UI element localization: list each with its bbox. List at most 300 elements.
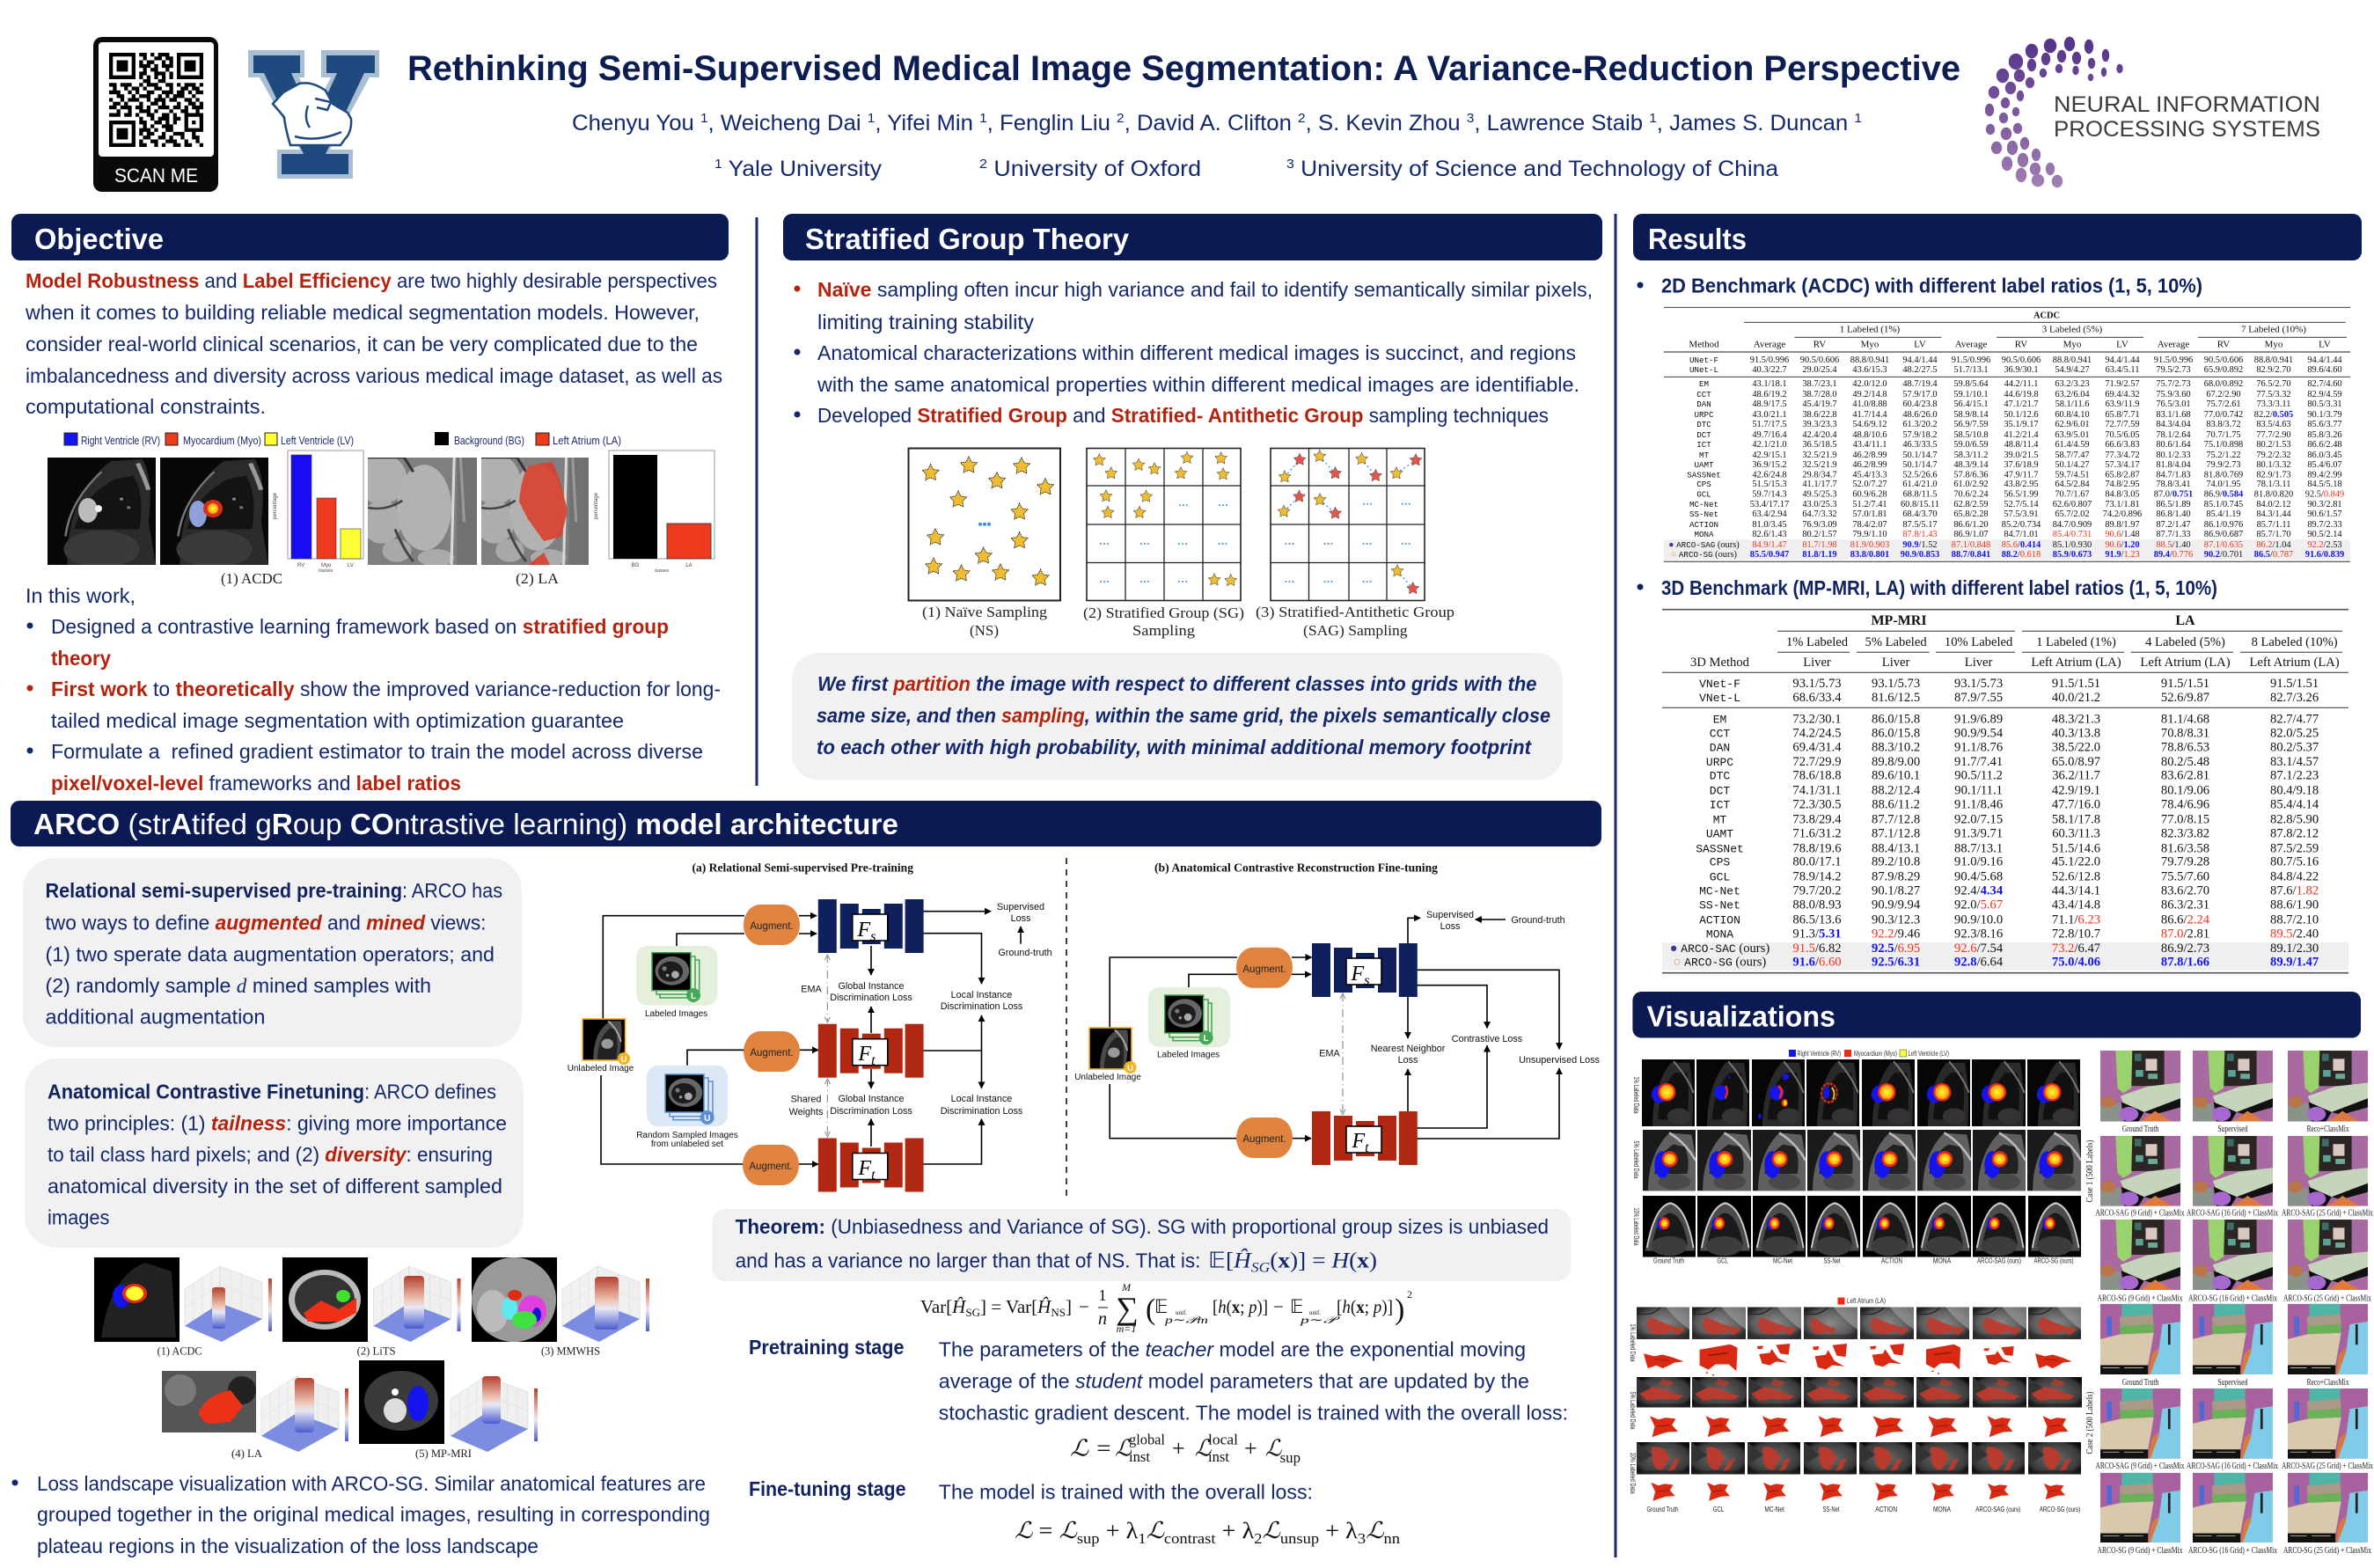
table: MP-MRI and LA results: 89.1/2.30 [2270, 942, 2319, 956]
table: MP-MRI and LA results: 86.3/2.31 [2161, 898, 2209, 912]
table: MP-MRI and LA results: 80.7/5.16 [2270, 855, 2319, 869]
teacher network Ft lower [818, 1139, 924, 1191]
loss labels: Discrimination Loss [830, 1106, 912, 1117]
table: ACDC results: 86.8/1.40 [2156, 509, 2191, 519]
figure: loss landscape visualization [94, 1257, 649, 1460]
teacher network Ft [818, 1024, 924, 1078]
text block: pretraining stage: stochastic gradient descent. The model is trained with the overall loss: [939, 1402, 1568, 1425]
table: ACDC results: 78.1/3.11 [2257, 480, 2290, 489]
figure: LA qualitative results [1629, 1297, 2082, 1513]
table: MP-MRI and LA results: 89.9/1.47 [2270, 956, 2319, 970]
panel: theorem: x)] = H(x) [1278, 1249, 1376, 1273]
icon: QR code with SCAN ME [93, 37, 218, 192]
loss labels: Discrimination Loss [830, 993, 912, 1003]
table: MP-MRI and LA results: ○ ARCO-SG (ours) [1674, 956, 1766, 970]
table: MP-MRI and LA results: 88.2/12.4 [1872, 784, 1921, 798]
table: MP-MRI and LA results: 91.7/7.41 [1954, 755, 2003, 769]
table: MP-MRI and LA results: 73.2/30.1 [1792, 713, 1842, 727]
formula: pretraining loss: inst [1208, 1448, 1229, 1465]
table: ACDC results: 3 Labeled (5%) [2042, 325, 2103, 335]
table: ACDC results: 85.1/0.745 [2204, 500, 2243, 509]
formula: fine-tuning loss: + λ [1215, 1518, 1255, 1543]
table: MP-MRI and LA results: 93.1/5.73 [1792, 677, 1842, 691]
table: ACDC results: 86.2/1.04 [2256, 540, 2291, 550]
image: LA raw and segmentation [356, 454, 589, 567]
text block: In this work: In this work, [26, 584, 136, 607]
table: MP-MRI and LA results: 48.3/21.3 [2052, 713, 2100, 727]
table: ACDC results: 82.9/1.73 [2256, 470, 2291, 480]
text block: loss landscape bullet: grouped together in the original medical images, resulting in corresponding [37, 1503, 710, 1526]
loss labels: Nearest Neighbor [1371, 1044, 1446, 1054]
table: MP-MRI and LA results: 91.3/9.71 [1954, 827, 2003, 841]
augment blocks: Augment. [1242, 964, 1286, 975]
table: MP-MRI and LA results: 60.3/11.3 [2052, 827, 2100, 841]
unlabeled image: U [1127, 1064, 1133, 1073]
formula: variance decomposition: M [1121, 1281, 1132, 1293]
table: ACDC results: 63.4/2.94 [1752, 509, 1787, 519]
formula: pretraining loss: global [1129, 1432, 1165, 1448]
panel: pre-training description: two ways to define augmented and mined views: [46, 912, 486, 934]
text block: In this work [26, 584, 721, 795]
panel: theorem: ( [1270, 1249, 1278, 1273]
text block: objective intro: imbalancedness and diversity across various medical image dataset, as well as [26, 364, 722, 387]
table: ACDC results: 61.4/21.0 [1902, 480, 1938, 489]
formula: variance decomposition: 2 [1407, 1288, 1412, 1301]
table: ACDC results: 45.4/13.3 [1852, 470, 1887, 480]
formula: fine-tuning loss: ℒ [1366, 1518, 1385, 1543]
table: MP-MRI and LA results: 10% Labeled [1945, 635, 2013, 649]
callout: partition and sampling: to each other with high probability, with minimal additional memory footprint [817, 736, 1532, 758]
captions: (4) LA [231, 1447, 263, 1460]
table: ACDC results: 61.0/2.92 [1953, 480, 1989, 489]
table: MP-MRI and LA results: 77.0/8.15 [2161, 813, 2209, 827]
table: MP-MRI and LA results: 87.9/8.29 [1872, 870, 1920, 884]
diagram: naive sampling: (NS) [970, 622, 999, 639]
panel: Stratified Group Theory [783, 214, 1602, 780]
table: ACDC results: 91.9/1.23 [2105, 550, 2140, 560]
panel: theorem: 𝔼[Ĥ [1208, 1248, 1249, 1273]
table: MP-MRI and LA results: 75.0/4.06 [2052, 956, 2100, 970]
table: ACDC results: 87.1/0.635 [2204, 540, 2243, 550]
legend: Left Ventricle (LV) [281, 434, 354, 447]
row and column labels: ACTION [1875, 1506, 1897, 1513]
bar chart: LA classes [594, 451, 714, 574]
table: ACDC results: 62.8/2.59 [1953, 500, 1989, 509]
captions [158, 1345, 600, 1460]
table: ACDC results: 38.7/28.0 [1802, 390, 1837, 399]
table: ACDC results: 51.7/13.1 [1953, 365, 1989, 375]
table: MP-MRI and LA results: 87.1/2.23 [2270, 769, 2319, 783]
loss labels: Contrastive Loss [1452, 1034, 1523, 1044]
table: ACDC results: 78.4/2.07 [1852, 520, 1887, 530]
table: ACDC results: 88.2/0.618 [2002, 550, 2041, 560]
table: ACDC results: 57.9/18.2 [1902, 430, 1938, 440]
table: MP-MRI and LA results: 72.7/29.9 [1792, 755, 1842, 769]
formula: variance decomposition: p∼𝒫m [1164, 1314, 1208, 1326]
bar chart: LA classes: LA [685, 563, 692, 568]
table: MP-MRI and LA results: 92.2/9.46 [1872, 927, 1920, 942]
table: ACDC results: 59.7/4.51 [2055, 470, 2090, 480]
table: ACDC results: 77.3/4.72 [2105, 451, 2140, 460]
formula: fine-tuning loss: 2 [1254, 1530, 1263, 1547]
table: MP-MRI and LA results: 82.8/5.90 [2270, 813, 2319, 827]
table: ACDC results: 65.8/2.87 [2105, 470, 2140, 480]
affiliations: 3 [1286, 157, 1294, 172]
text block: pretraining stage: The parameters of the teacher model are the exponential moving [939, 1338, 1526, 1361]
icon: NeurIPS logo [1986, 38, 2320, 187]
table: ACDC results: 80.5/3.31 [2307, 399, 2342, 409]
table: ACDC results: 86.9/0.687 [2204, 530, 2243, 539]
formula: variance decomposition: SG [965, 1306, 980, 1319]
table: ACDC results: 90.9/0.853 [1901, 550, 1939, 560]
table: MP-MRI and LA results: 89.6/10.1 [1872, 769, 1920, 783]
table: MP-MRI and LA results: 83.6/2.70 [2161, 884, 2209, 898]
text block: fine-tuning stage: Fine-tuning stage [749, 1477, 906, 1500]
table: ACDC results: RV [2217, 340, 2230, 350]
legend: Right Ventricle (RV) [81, 434, 160, 447]
table: ACDC results: 85.8/3.26 [2307, 430, 2342, 440]
table: ACDC results: CPS [1696, 480, 1711, 489]
table: ACDC results: 88.8/0.941 [1850, 355, 1889, 365]
formula: fine-tuning loss: ℒ [1147, 1518, 1165, 1543]
table: ACDC results: 91.5/0.996 [1952, 355, 1990, 365]
formula: variance decomposition: unif. [1176, 1309, 1187, 1316]
table: MP-MRI and LA results: 83.6/2.81 [2161, 769, 2209, 783]
authors: Chenyu You [572, 111, 691, 136]
table: MP-MRI and LA results: 4 Labeled (5%) [2145, 635, 2225, 649]
column dividers [757, 214, 1616, 1557]
table: MP-MRI and LA results: SASSNet [1696, 843, 1744, 856]
table: ACDC results: 75.1/0.898 [2204, 440, 2243, 450]
formula: variance decomposition: 𝔼 [1290, 1296, 1303, 1317]
formula: variance decomposition: − [1273, 1296, 1284, 1317]
table: ACDC results: 57.8/6.36 [1953, 470, 1989, 480]
table: MP-MRI and LA results: 78.8/19.6 [1792, 842, 1842, 856]
authors: 3 [1467, 111, 1474, 126]
table: ACDC results: 64.7/3.32 [1802, 509, 1837, 519]
loss labels: Ground-truth [998, 948, 1052, 958]
authors: 1 [979, 111, 987, 126]
table: MP-MRI and LA results: 43.4/14.8 [2052, 898, 2100, 912]
table: MP-MRI and LA results: 90.1/11.1 [1954, 784, 2003, 798]
table: ACDC results: 85.4/0.731 [2053, 530, 2092, 539]
table: ACDC results: 44.6/19.8 [2004, 390, 2039, 399]
connectors [601, 912, 1021, 1164]
affiliations: University of Oxford [987, 157, 1201, 181]
table: ACDC results: 7 Labeled (10%) [2241, 325, 2306, 335]
formula: variance decomposition: [h(x; p)] [1337, 1296, 1393, 1317]
table: MP-MRI and LA results: 90.1/8.27 [1872, 884, 1920, 898]
table: ACDC results: 90.5/0.606 [2204, 355, 2243, 365]
bar chart: LA classes: classes [655, 568, 670, 574]
table: ACDC results: 57.0/1.81 [1852, 509, 1887, 519]
table: MP-MRI and LA results: 91.3/5.31 [1792, 927, 1842, 942]
table: ACDC results: 80.6/1.64 [2156, 440, 2191, 450]
table: MP-MRI and LA results: 92.3/8.16 [1954, 927, 2003, 942]
table: ACDC results: 52.0/7.27 [1852, 480, 1887, 489]
table: ACDC results: 58.5/10.8 [1953, 430, 1989, 440]
legend: Background (BG) [454, 434, 524, 447]
figure: ACDC qualitative results [1632, 1050, 2082, 1265]
figure: scene segmentation case 1: Ground Truth [2122, 1125, 2158, 1134]
table: ACDC results: 76.5/3.01 [2156, 399, 2191, 409]
table: ACDC results: LV [2116, 340, 2129, 350]
bar chart: ACDC classes: LV [348, 563, 354, 568]
table: MP-MRI and LA results [1662, 610, 2348, 973]
table: ACDC results: 87.8/1.43 [1902, 530, 1938, 539]
heading: Visualizations: Visualizations [1647, 1000, 1835, 1032]
loss labels [789, 902, 1052, 1117]
table: ACDC results: 63.2/6.04 [2055, 390, 2090, 399]
table: MP-MRI and LA results: 87.5/2.59 [2270, 842, 2319, 856]
table: ACDC results: 37.6/18.9 [2004, 460, 2039, 470]
table: MP-MRI and LA results: 92.0/5.67 [1954, 898, 2003, 912]
table: ACDC results: 72.7/7.59 [2105, 420, 2140, 429]
table: ACDC results: 84.7/0.909 [2053, 520, 2092, 530]
table: ACDC results: Method [1689, 340, 1719, 350]
table: ACDC results: 88.5/1.40 [2156, 540, 2191, 550]
labeled images [636, 946, 718, 1019]
table: ACDC results: UNet-L [1689, 365, 1718, 375]
table: ACDC results: 52.7/5.14 [2004, 500, 2039, 509]
text block: In this work: Formulate a refined gradient estimator to train the model across diverse [51, 740, 703, 763]
text block: pretraining stage: Pretraining stage [749, 1336, 905, 1359]
table: ACDC results: 84.9/1.47 [1752, 540, 1787, 550]
row: 5% labeled [1643, 1130, 2082, 1191]
table: ACDC results: 43.8/2.95 [2004, 480, 2039, 489]
heading: Objective [11, 214, 729, 260]
table: ACDC results: Average [2158, 340, 2189, 350]
table: MP-MRI and LA results: 86.9/2.73 [2161, 942, 2209, 956]
diagram: stratified group sampling [1083, 449, 1244, 639]
table: MP-MRI and LA results: 82.7/3.26 [2270, 691, 2319, 705]
formula: pretraining loss: ℒ [1195, 1436, 1213, 1462]
table: MP-MRI and LA results: 71.1/6.23 [2052, 913, 2100, 927]
table: ACDC results: 70.7/1.75 [2206, 430, 2241, 440]
heading: Stratified Group Theory [783, 214, 1602, 260]
table: ACDC results: 65.7/2.02 [2055, 509, 2090, 519]
figure: scene segmentation case 2: Supervised [2217, 1378, 2247, 1388]
table: ACDC results: Average [1955, 340, 1987, 350]
table: ACDC results: 53.4/17.17 [1750, 500, 1789, 509]
table: ACDC results: 68.4/3.70 [1902, 509, 1938, 519]
table: ACDC results: 43.4/11.1 [1853, 440, 1887, 450]
augment blocks [1236, 948, 1293, 1158]
table: ACDC results: 90.9/1.52 [1902, 540, 1938, 550]
table: ACDC results: 88.7/0.841 [1952, 550, 1990, 560]
panel: pre-training description: Relational semi-supervised pre-training: ARCO has [46, 879, 502, 902]
table: ACDC results: 49.7/16.4 [1752, 430, 1787, 440]
loss labels: EMA [1319, 1049, 1340, 1059]
table: MP-MRI and LA results: 78.9/14.2 [1792, 870, 1842, 884]
table: ACDC results: 43.0/25.3 [1802, 500, 1837, 509]
table: ACDC results: 60.8/15.11 [1901, 500, 1939, 509]
table: ACDC results: 32.5/21.9 [1802, 460, 1837, 470]
table: ACDC results: 48.3/9.14 [1953, 460, 1989, 470]
table: ACDC results: SS-Net [1689, 509, 1718, 519]
figure: scene segmentation case 2: Reco+ClassMix [2307, 1378, 2349, 1388]
table: MP-MRI and LA results: 91.0/9.16 [1954, 855, 2003, 869]
text block: objective intro [25, 269, 722, 418]
table: ACDC results: 84.0/2.12 [2256, 500, 2291, 509]
table: ACDC results: CCT [1696, 390, 1711, 399]
formula: variance decomposition: Ĥ [1037, 1296, 1052, 1317]
table: ACDC results: 61.4/4.59 [2055, 440, 2090, 450]
table: ACDC results: 75.2/1.22 [2206, 451, 2241, 460]
table: ACDC results: 83.8/0.801 [1850, 550, 1889, 560]
table: ACDC results: 77.7/2.90 [2256, 430, 2291, 440]
table: ACDC results: 84.3/1.44 [2256, 509, 2291, 519]
loss labels: Local Instance [951, 990, 1012, 1000]
table: MP-MRI and LA results: 40.0/21.2 [2052, 691, 2100, 705]
table: ACDC results: 59.1/10.1 [1953, 390, 1989, 399]
row: 1% labeled [1642, 1059, 2080, 1126]
table: ACDC results: 63.9/5.01 [2055, 430, 2090, 440]
table: ACDC results: 57.3/4.17 [2105, 460, 2140, 470]
table: ACDC results: 35.1/9.17 [2004, 420, 2039, 429]
row and column labels: MONA [1933, 1257, 1952, 1265]
image: ACDC raw and segmentation [48, 458, 268, 568]
table: ACDC results: 94.4/1.44 [2307, 355, 2342, 365]
loss labels: Unsupervised Loss [1519, 1055, 1601, 1066]
formula: fine-tuning loss: + λ [1319, 1518, 1358, 1543]
table: ACDC results: 79.9/1.10 [1852, 530, 1887, 539]
diagram: relational semi-supervised pre-training [568, 862, 1052, 1191]
authors: 2 [1298, 111, 1306, 126]
table: ACDC results: 83.5/4.63 [2256, 420, 2291, 429]
row and column labels: GCL [1713, 1506, 1725, 1513]
figure: scene segmentation case 1: ARCO-SG (16 Grid) + ClassMix [2188, 1293, 2277, 1303]
table: ACDC results: 74.8/2.95 [2105, 480, 2140, 489]
chart: LiTS loss surface [373, 1266, 461, 1342]
table: ACDC results: ACDC [2033, 311, 2060, 321]
table: MP-MRI and LA results: 47.7/16.0 [2052, 798, 2100, 812]
formula: variance decomposition: ( [1146, 1293, 1155, 1326]
text block: loss landscape bullet [12, 1472, 710, 1557]
legend: ACDC classes: Right Ventricle (RV) [1797, 1050, 1841, 1058]
heading: Visualizations [1632, 992, 2361, 1038]
table: MP-MRI and LA results: VNet-L [1699, 692, 1740, 705]
table: ACDC results: 48.6/26.0 [1902, 410, 1938, 420]
table: ACDC results: 56.9/7.59 [1953, 420, 1989, 429]
row and column labels: ARCO-SAG (ours) [1977, 1257, 2021, 1265]
table: MP-MRI and LA results: 91.5/1.51 [2270, 677, 2319, 691]
loss labels: Ground-truth [1511, 915, 1565, 926]
student network Fs: F [858, 919, 870, 942]
row and column labels: SS-Net [1823, 1257, 1841, 1265]
random sampled images: from unlabeled set [651, 1139, 723, 1149]
student network Fs: s [1364, 973, 1369, 988]
table: ACDC results: 57.5/3.91 [2004, 509, 2039, 519]
text block: fine-tuning stage [749, 1477, 1313, 1503]
formula: pretraining loss: sup [1280, 1449, 1301, 1466]
formula: fine-tuning loss: 1 [1138, 1530, 1147, 1547]
row: 1% 3D renderings [1644, 1344, 2072, 1375]
table: MP-MRI and LA results: Left Atrium (LA) [2140, 656, 2231, 670]
icon: NeurIPS logo: NEURAL INFORMATION [2054, 92, 2320, 117]
affiliations: 1 [714, 157, 722, 172]
table: ACDC results: 48.9/17.5 [1752, 399, 1787, 409]
row and column labels: ARCO-SG (ours) [2040, 1506, 2081, 1513]
formula: fine-tuning loss: ℒ = ℒ [1015, 1518, 1075, 1543]
table: MP-MRI and LA results: 81.1/4.68 [2161, 713, 2209, 727]
row and column labels: 10% Labeled Data [1629, 1452, 1637, 1494]
table: MP-MRI and LA results: 87.6/1.82 [2270, 884, 2319, 898]
formula: variance decomposition: m=1 [1117, 1323, 1136, 1335]
table: MP-MRI and LA results: DCT [1710, 785, 1730, 798]
teacher network Ft: F [858, 1043, 871, 1066]
formula: variance decomposition: [h(x; p)] [1213, 1296, 1268, 1317]
table: MP-MRI and LA results: 78.6/18.8 [1792, 769, 1842, 783]
table: ACDC results: ○ ARCO-SG (ours) [1671, 550, 1737, 560]
row: 5% 3D renderings [1650, 1416, 2068, 1437]
table: ACDC results: 47.9/11.7 [2004, 470, 2038, 480]
formula: variance decomposition: ∑ [1116, 1291, 1139, 1326]
image: ACDC segmentation [94, 1257, 180, 1342]
callout: partition and sampling: same size, and then sampling, within the same grid, the pixels semantically close [817, 704, 1550, 727]
table: MP-MRI and LA results: MONA [1706, 928, 1733, 942]
table: MP-MRI and LA results: 74.1/31.1 [1792, 784, 1842, 798]
table: ACDC results: 87.0/0.751 [2154, 489, 2193, 499]
diagram title b: (b) Anatomical Contrastive Reconstruction Fine-tuning [1154, 862, 1438, 876]
table: ACDC results: 90.5/0.606 [2002, 355, 2041, 365]
loss labels: Discrimination Loss [941, 1106, 1023, 1117]
table: MP-MRI and LA results: Left Atrium (LA) [2031, 656, 2121, 670]
table: MP-MRI and LA results: 82.7/4.77 [2270, 713, 2319, 727]
table: ACDC results: 85.9/0.673 [2053, 550, 2092, 560]
heading: Stratified Group Theory: Stratified Group Theory [805, 223, 1130, 255]
row and column labels: 1% Labeled Data [1629, 1323, 1637, 1362]
table: ACDC results: 91.5/0.996 [2154, 355, 2193, 365]
icon: NeurIPS logo: PROCESSING SYSTEMS [2054, 117, 2320, 142]
panel: pre-training description: (1) two sperate data augmentation operators; and [46, 943, 495, 966]
table: ACDC results: DTC [1696, 420, 1711, 429]
table: ACDC results: MONA [1694, 530, 1714, 539]
table: ACDC results: 90.2/0.701 [2204, 550, 2243, 560]
table: ACDC results: 81.8/0.820 [2254, 489, 2293, 499]
table: MP-MRI and LA results: 90.4/5.68 [1954, 870, 2003, 884]
table: MP-MRI and LA results: SS-Net [1699, 899, 1740, 912]
table: ACDC results: 59.0/6.59 [1953, 440, 1989, 450]
panel: theorem: SG [1251, 1261, 1271, 1276]
table: MP-MRI and LA results: 65.0/8.97 [2052, 755, 2100, 769]
table: MP-MRI and LA results: 93.1/5.73 [1872, 677, 1920, 691]
loss labels [1319, 910, 1601, 1066]
loss labels: Discrimination Loss [941, 1001, 1023, 1012]
legend: ACDC classes: Left Ventricle (LV) [1908, 1050, 1949, 1058]
table: ACDC results: 39.3/23.3 [1802, 420, 1837, 429]
table: MP-MRI and LA results: 78.8/6.53 [2161, 741, 2209, 755]
table: MP-MRI and LA results: 91.5/1.51 [2161, 677, 2209, 691]
table: ACDC results: 43.1/18.1 [1752, 379, 1787, 389]
table: ACDC results: 88.8/0.941 [2254, 355, 2293, 365]
unlabeled image: Unlabeled Image [1074, 1073, 1141, 1082]
text block: In this work: Designed a contrastive learning framework based on stratified group [51, 615, 669, 638]
table: ACDC results: 46.2/8.99 [1852, 460, 1887, 470]
table: ACDC results: 85.5/0.947 [1750, 550, 1789, 560]
table: ACDC results: 59.8/5.64 [1953, 379, 1989, 389]
figure: scene segmentation case 2: Ground Truth [2122, 1378, 2158, 1388]
table: ACDC results: GCL [1696, 489, 1711, 499]
panel: theorem [712, 1209, 1571, 1281]
heading: Results [1633, 214, 2362, 260]
panel: pre-training description: (2) randomly sample d mined samples with [46, 974, 431, 997]
table: MP-MRI and LA results: 40.3/13.8 [2052, 727, 2100, 741]
row: 10% MRI slices [1637, 1442, 2081, 1475]
table: ACDC results: 94.4/1.44 [2105, 355, 2140, 365]
table: ACDC results: 82.2/0.505 [2254, 410, 2293, 420]
unlabeled image [568, 1019, 634, 1073]
